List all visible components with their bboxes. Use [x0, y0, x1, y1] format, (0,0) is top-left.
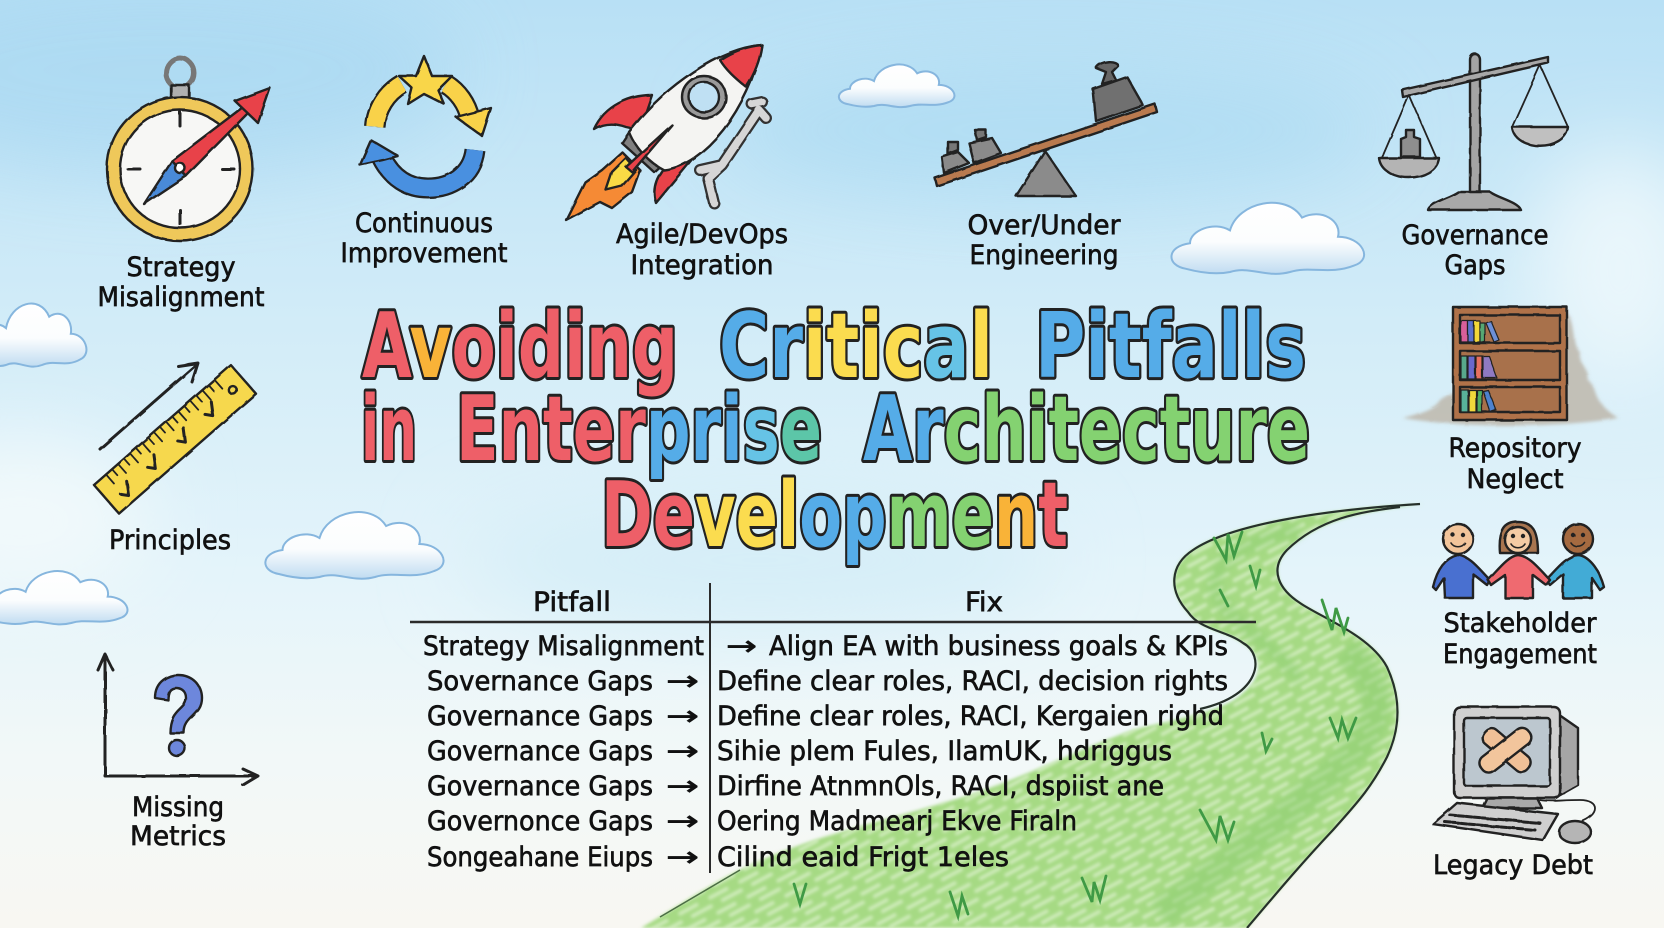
cloud right: [1171, 203, 1364, 274]
table rows: →: [666, 806, 699, 837]
table rows: Strategy Misalignment: [423, 631, 704, 662]
cloud left lower: [0, 571, 128, 624]
table grid lines: [410, 583, 1256, 873]
table rows: Governance Gaps: [427, 771, 653, 802]
cloud left upper: [0, 304, 86, 367]
table rows: Governance Gaps: [427, 701, 653, 732]
label: Governance Gaps: [1402, 220, 1548, 281]
icon: ruler with arrow: [94, 363, 256, 514]
table rows: →: [666, 666, 699, 697]
icon: rocket with wrench: [566, 45, 766, 220]
label: Missing Metrics: Missing: [132, 792, 224, 823]
label: Continuous Improvement: [340, 208, 508, 269]
label: Governance Gaps: Governance: [1402, 220, 1548, 251]
label: Over/Under Engineering: [968, 210, 1121, 271]
label: Agile/DevOps Integration: Integration: [630, 250, 774, 281]
title: [361, 294, 1310, 568]
label: Repository Neglect: Repository: [1448, 433, 1582, 464]
label: Agile/DevOps Integration: Agile/DevOps: [616, 219, 788, 250]
table rows: Governance Gaps: [427, 736, 653, 767]
icon: neglected repository bookshelf: [1403, 307, 1618, 426]
icon: legacy computer with bandage: [1433, 707, 1595, 843]
table header: Fix: [965, 587, 1003, 618]
label: Continuous Improvement: Improvement: [340, 238, 508, 269]
label: Stakeholder Engagement: Engagement: [1443, 639, 1597, 670]
table rows: Dirfine AtnmnOls, RACI, dspiist ane: [717, 771, 1164, 802]
label: Stakeholder Engagement: [1443, 608, 1597, 670]
table header: [533, 587, 1003, 618]
title: Critical: [719, 294, 993, 399]
title: Architecture: [863, 377, 1310, 482]
icon: continuous improvement loop: [360, 56, 491, 188]
table rows: Songeahane Eiups: [427, 842, 653, 873]
table rows: [423, 631, 1228, 873]
icon: missing metrics chart with question mark: [98, 654, 258, 785]
label: Continuous Improvement: Continuous: [355, 208, 493, 239]
cloud top centre: [839, 64, 954, 107]
label: Stakeholder Engagement: Stakeholder: [1444, 608, 1597, 639]
label: Missing Metrics: [130, 792, 226, 852]
table rows: Cilind eaid Frigt 1eles: [717, 842, 1009, 873]
label: Strategy Misalignment: [98, 252, 264, 313]
label: Over/Under Engineering: Engineering: [970, 240, 1118, 271]
icon: seesaw over and under engineering: [935, 62, 1157, 196]
table rows: Define clear roles, RACI, decision rights: [717, 666, 1228, 697]
title: Pitfalls: [1035, 294, 1306, 399]
table rows: Governonce Gaps: [427, 806, 653, 837]
title: in: [361, 377, 417, 482]
table rows: →: [666, 842, 699, 873]
label: Repository Neglect: Neglect: [1466, 464, 1564, 495]
table rows: →: [666, 771, 699, 802]
title: Avoiding: [362, 294, 678, 399]
icon: three stakeholders holding hands: [1433, 522, 1604, 598]
table header: Pitfall: [533, 587, 611, 618]
label: Principles: Principles: [109, 525, 231, 556]
table: pitfall and fix: [410, 583, 1256, 873]
title: Enterprise: [456, 377, 822, 482]
icon: tilted governance scale: [1379, 54, 1568, 210]
label: Governance Gaps: Gaps: [1444, 250, 1506, 281]
label: Repository Neglect: [1448, 433, 1582, 495]
label: Over/Under Engineering: Over/Under: [968, 210, 1121, 241]
label: Legacy Debt: Legacy Debt: [1433, 850, 1593, 881]
winding green path: [641, 504, 1423, 928]
icon: compass: [107, 58, 270, 241]
table rows: →: [666, 736, 699, 767]
label: Strategy Misalignment: Misalignment: [98, 282, 264, 313]
table rows: Sovernance Gaps: [427, 666, 653, 697]
table rows: →: [726, 631, 757, 662]
table rows: Sihie plem Fules, IlamUK, hdriggus: [717, 736, 1172, 767]
label: Missing Metrics: Metrics: [130, 821, 226, 852]
label: Strategy Misalignment: Strategy: [126, 252, 236, 283]
label: Agile/DevOps Integration: [616, 219, 788, 281]
table rows: Oering Madmearj Ekve Firaln: [717, 806, 1077, 837]
title: Development: [601, 463, 1068, 568]
table rows: Align EA with business goals & KPIs: [769, 631, 1228, 662]
table rows: Define clear roles, RACI, Kergaien righd: [717, 701, 1224, 732]
cloud middle left: [265, 512, 444, 579]
table rows: →: [666, 701, 699, 732]
